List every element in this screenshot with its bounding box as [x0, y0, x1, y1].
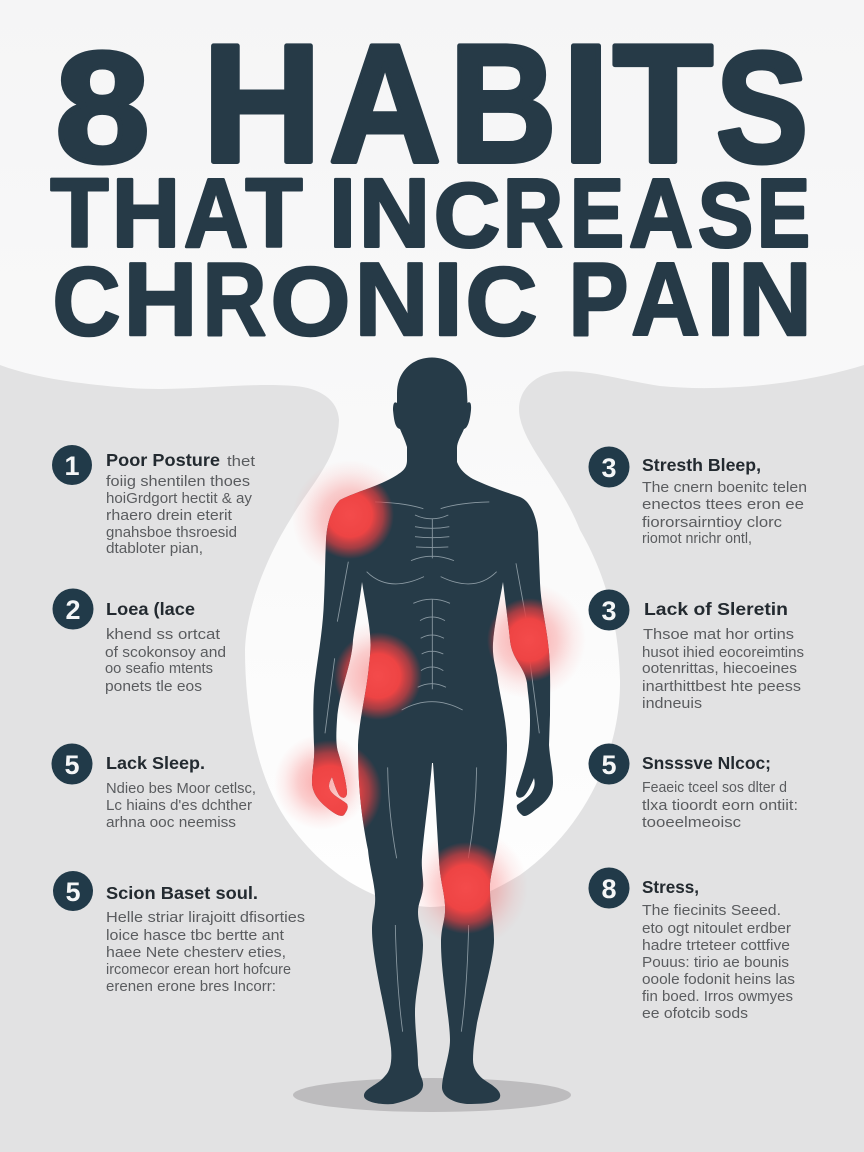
habit 7: 5 [601, 750, 617, 780]
title line 3: P [568, 242, 628, 358]
body 8: fin boed. Irros owmyes [642, 989, 793, 1005]
habit 2: 2 [65, 595, 81, 625]
title line 2: R [503, 158, 563, 268]
title line 2: H [112, 158, 180, 268]
heading 5: Stresth Bleep, [642, 455, 761, 475]
title line 3: C [52, 247, 120, 356]
body 8: ooole fodonit heins las [642, 972, 795, 988]
heading 2: Loea (lace [106, 599, 195, 619]
human body silhouette [312, 358, 553, 1104]
body 4: ircomecor erean hort hofcure [106, 962, 291, 978]
title line 2: C [434, 166, 500, 266]
body 8: eto ogt nitoulet erdber [642, 921, 791, 937]
title line 3: R [202, 242, 266, 358]
title line 3: A [631, 242, 700, 358]
title line 3: N [354, 242, 428, 358]
body 3: arhna ooc neemiss [106, 815, 236, 831]
body 7: Feaeic tceel sos dlter d [642, 780, 787, 796]
body 1: rhaero drein eterit [106, 508, 232, 524]
body 4: Helle striar lirajoitt dfisorties [106, 910, 305, 926]
badge 4 [53, 871, 93, 911]
body 5: riomot nrichr ontl, [642, 531, 752, 547]
habit 1 [52, 445, 255, 557]
title line 1: T [613, 10, 713, 198]
badge 2 [52, 588, 94, 630]
title line 2: A [184, 158, 248, 268]
heading 1: Poor Posture [106, 450, 220, 470]
title line 2: N [359, 158, 430, 268]
habit 2 [52, 588, 226, 695]
habit 3 [52, 744, 256, 831]
habit 7 [588, 744, 798, 831]
pain hotspots on body [312, 484, 550, 933]
body 7 [642, 780, 798, 831]
badge 7 [588, 744, 630, 784]
body 2: of scokonsoy and [105, 645, 226, 661]
title [50, 10, 812, 358]
title line 1: S [716, 20, 808, 196]
title line 3: I [706, 242, 734, 358]
title line 1: A [329, 10, 441, 198]
body 6: ootenrittas, hiecoeines [642, 661, 797, 677]
heading 4: Scion Baset soul. [106, 883, 258, 903]
habit 5: 3 [601, 453, 617, 483]
heading 6: Lack of Sleretin [644, 599, 788, 619]
body 8: ee ofotcib sods [642, 1006, 748, 1022]
body 3: Lc hiains d'es dchther [106, 798, 252, 814]
body 1: dtabloter pian, [106, 541, 203, 557]
body 5 [642, 480, 807, 547]
title line 3: N [738, 242, 812, 358]
title line 2: A [629, 158, 693, 268]
heading 3: Lack Sleep. [106, 753, 205, 773]
body 2: khend ss ortcat [106, 627, 220, 643]
body 7: tlxa tioordt eorn ontiit: [642, 798, 798, 814]
body 5: enectos ttees eron ee [642, 497, 804, 513]
body 2: oo seafio mtents [105, 661, 213, 677]
title line 2: E [757, 158, 810, 268]
body 1: foiig shentilen thoes [106, 474, 250, 490]
habit 6: 3 [601, 596, 617, 626]
title line 3: H [124, 242, 198, 358]
body 7: tooeelmeoisc [642, 815, 741, 831]
body 6: Thsoe mat hor ortins [643, 627, 794, 643]
title line 2: S [698, 166, 753, 266]
title line 3: C [466, 247, 538, 356]
body 2 [105, 627, 226, 695]
title line 2: I [329, 158, 356, 268]
title line 1: 8 [56, 20, 150, 196]
heading 7: Snsssve Nlcoc; [642, 753, 771, 773]
body 2: ponets tle eos [105, 679, 202, 695]
body 5: fiororsairntioy clorc [642, 515, 782, 531]
body 8: The fiecinits Seeed. [642, 903, 781, 919]
outer pain glows [274, 460, 586, 948]
heading 8: Stress, [642, 877, 699, 897]
title line 2: T [50, 158, 108, 268]
title line 1: I [562, 10, 610, 198]
body 8: Pouus: tirio ae bounis [642, 955, 789, 971]
title line 2: E [570, 158, 624, 268]
body 6: inarthittbest hte peess [642, 679, 801, 695]
habit 4: 5 [65, 877, 81, 907]
body 8 [642, 903, 795, 1022]
body contour lines [325, 502, 539, 733]
badge 3 [52, 744, 92, 784]
floor shadow [293, 1078, 571, 1112]
body 3: Ndieo bes Moor cetlsc, [106, 781, 256, 797]
body 4 [106, 910, 305, 995]
badge 8 [588, 868, 630, 908]
body 6: indneuis [642, 696, 702, 712]
badge 6 [588, 590, 630, 630]
habit 8 [588, 868, 795, 1022]
body 6: husot ihied eocoreimtins [642, 645, 804, 661]
habit 4 [53, 871, 305, 995]
title line 1: B [450, 10, 556, 198]
body 8: hadre trteteer cottfive [642, 938, 790, 954]
badge 5 [588, 446, 630, 488]
body 5: The cnern boenitc telen [642, 480, 807, 496]
body 1: hoiGrdgort hectit & ay [106, 491, 253, 507]
body 4: erenen erone bres Incorr: [106, 979, 276, 995]
badge 1 [52, 445, 92, 485]
body 1: gnahsboe thsroesid [106, 525, 237, 541]
body 3 [106, 781, 256, 831]
habit 6 [588, 590, 804, 712]
title line 3: I [433, 242, 463, 358]
habit 1: 1 [64, 451, 80, 481]
habit 5 [588, 446, 807, 547]
body 4: loice hasce tbc bertte ant [106, 928, 284, 944]
habit 3: 5 [64, 750, 80, 780]
body 4: haee Nete chesterv eties, [106, 945, 286, 961]
title line 1: H [202, 10, 322, 198]
body 1 [106, 474, 253, 557]
habit 8: 8 [601, 874, 617, 904]
title line 2: T [246, 158, 302, 268]
body 6 [642, 627, 804, 712]
habit 1: thet [227, 454, 255, 470]
title line 3: O [270, 247, 350, 356]
white header and body halo shape [0, 0, 864, 907]
